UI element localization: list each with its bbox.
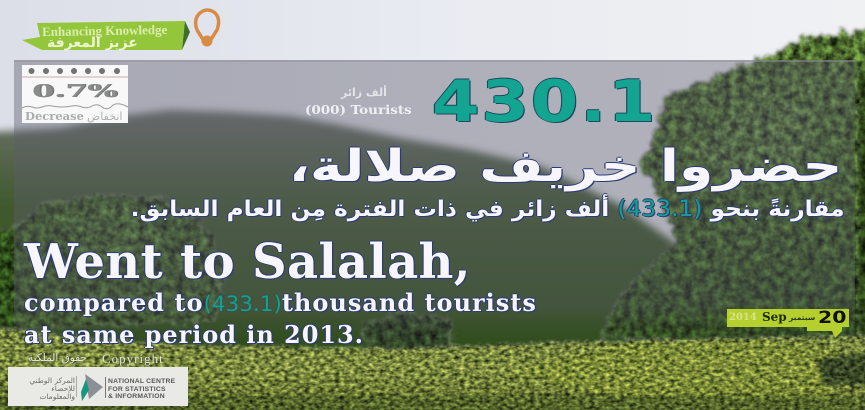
big number: 430.1: 430.1 xyxy=(432,69,657,135)
calendar card: 0.7% decrease: انخفاض xyxy=(87,110,122,123)
English headline: Went to Salalah, xyxy=(24,234,471,290)
English subheading: at same period in 2013. xyxy=(24,320,364,349)
date tag: 20 Sep 2014 xyxy=(727,308,849,338)
copyright line: حقوق الملكية xyxy=(28,352,87,364)
calendar card: 0.7% decrease: Decrease xyxy=(25,109,84,123)
date tag: 20 Sep 2014: سبتمبر xyxy=(789,313,815,322)
calendar card: 0.7% decrease xyxy=(22,65,128,123)
date tag: 20 Sep 2014: Sep xyxy=(762,310,787,324)
logo: National Centre for Statistics & Information: NATIONAL CENTRE xyxy=(108,378,175,385)
copyright line: Copyright xyxy=(102,351,164,366)
English subheading xyxy=(24,288,537,349)
date tag: 20 Sep 2014: 20 xyxy=(818,308,846,328)
logo: National Centre for Statistics & Information: المركز الوطني للإحصاء والمعلومات xyxy=(29,376,75,401)
copyright line xyxy=(28,351,164,366)
label: thousand tourists xyxy=(305,85,412,117)
logo: National Centre for Statistics & Information xyxy=(8,367,188,406)
calendar card: 0.7% decrease: 0.7% xyxy=(32,81,117,102)
logo banner: Enhancing Knowledge: Enhancing Knowledge xyxy=(42,22,167,39)
label: thousand tourists: (000) Tourists xyxy=(305,102,412,117)
logo: National Centre for Statistics & Information: FOR STATISTICS xyxy=(108,386,166,392)
Arabic subheading: مقارنةً بنحو (433.1) ألف زائر في ذات الفترة مِن العام السابق. xyxy=(131,197,845,222)
logo banner: Enhancing Knowledge: عزيز المعرفة xyxy=(47,35,138,51)
Arabic headline: حضروا خريف صلالة، xyxy=(288,141,842,192)
label: thousand tourists: ألف زائر xyxy=(341,86,387,99)
English subheading: compared to(433.1)thousand tourists xyxy=(24,288,537,317)
logo banner: Enhancing Knowledge xyxy=(22,8,220,51)
logo: National Centre for Statistics & Information: & INFORMATION xyxy=(108,393,165,400)
date tag: 20 Sep 2014: 2014 xyxy=(729,312,757,323)
